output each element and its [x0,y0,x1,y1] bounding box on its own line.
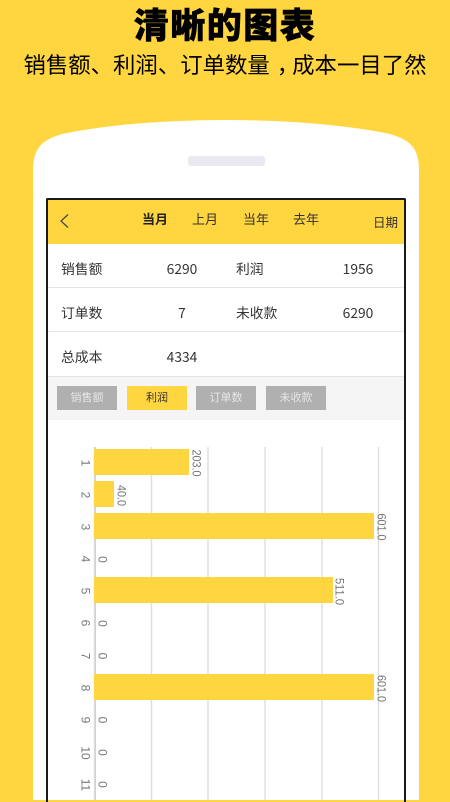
filter: sales: 销售额 [70,389,104,405]
row: total cost: 4334 [167,346,197,366]
tab: last year: 去年 [293,209,319,228]
value labels: 0 [96,620,110,627]
category axis labels: 11 [78,779,92,792]
phone speaker [188,156,265,166]
tab: current month: 当月 [142,209,168,228]
metric filter strip [48,377,404,420]
back arrow icon [60,214,68,228]
value labels: 601.0 [374,675,388,702]
row: orders and receivables [48,288,404,332]
filter: orders: 订单数 [210,389,242,405]
row: sales and profit: 1956 [343,258,373,278]
category axis labels: 9 [78,717,92,724]
category axis labels: 7 [78,653,92,660]
filter: profit active [127,386,187,410]
filter: receivables: 未收款 [280,389,312,405]
row: sales and profit [48,244,404,288]
category axis labels [78,460,92,792]
category axis labels: 5 [78,588,92,595]
filter: receivables [266,386,326,410]
category axis labels: 8 [78,685,92,692]
row: orders and receivables: 未收款 [236,302,277,322]
value labels: 0 [96,653,110,660]
value labels: 511.0 [332,578,346,605]
row: total cost: 总成本 [61,346,102,366]
subtitle: 销售额、利润、订单数量 ，成本一目了然 [23,48,427,80]
row: total cost [48,332,404,377]
screen border [46,198,406,802]
app header bar [46,198,406,244]
category axis labels: 1 [78,460,92,467]
value labels: 0 [96,749,110,756]
value labels: 203.0 [190,450,204,477]
row: sales and profit: 销售额 [61,258,102,278]
row: orders and receivables: 订单数 [61,302,102,322]
app screen [46,198,406,800]
row: orders and receivables: 6290 [343,302,373,322]
bars [94,449,374,700]
metrics table [48,258,404,377]
value labels: 0 [96,717,110,724]
row: orders and receivables: 7 [178,302,186,322]
category axis labels: 4 [78,556,92,563]
row: sales and profit: 6290 [167,258,197,278]
value labels [96,450,388,788]
value labels: 601.0 [374,514,388,541]
value labels: 40.0 [114,485,128,506]
tab: last month: 上月 [192,209,218,228]
filter: profit active: 利润 [146,389,168,405]
category axis labels: 10 [78,746,92,760]
value labels: 0 [96,781,110,788]
category axis labels: 6 [78,620,92,627]
tab: current year: 当年 [243,209,269,228]
date button: 日期 [373,212,398,231]
row: sales and profit: 利润 [236,258,264,278]
filter: sales [57,386,117,410]
filter: orders [196,386,256,410]
category axis labels: 3 [78,524,92,531]
category axis labels: 2 [78,492,92,499]
value labels: 0 [96,556,110,563]
